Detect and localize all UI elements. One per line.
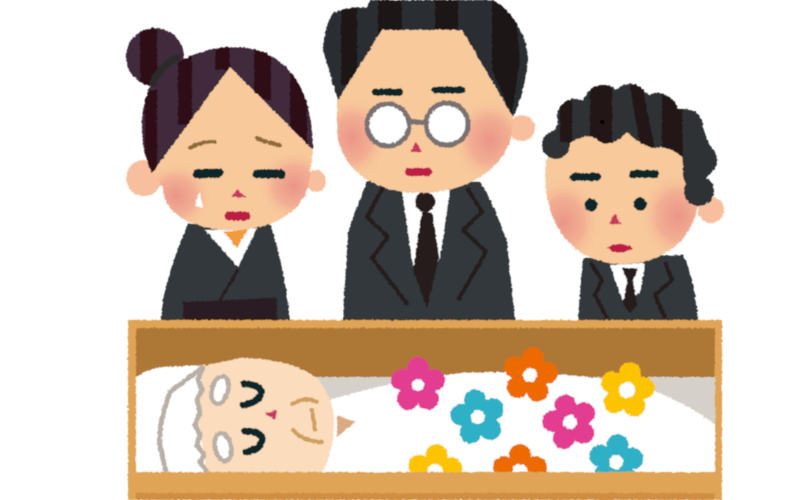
woman face (152, 66, 314, 232)
figure: woman (126, 25, 330, 320)
coffin frame (128, 320, 722, 500)
man ear (509, 115, 535, 141)
flower: teal (450, 388, 504, 445)
woman ears (126, 160, 326, 196)
man facial features (375, 90, 462, 172)
flower: pink large (542, 394, 596, 450)
figure: man with glasses (316, 0, 535, 320)
deceased: nose (337, 415, 355, 437)
woman kimono (161, 223, 290, 320)
boy suit (578, 255, 698, 320)
man hair (323, 0, 528, 117)
coffin bottom edge (136, 493, 715, 500)
man face (336, 28, 514, 195)
figure: boy (525, 84, 724, 320)
woman hair (142, 40, 313, 175)
coffin (128, 320, 722, 500)
boy curly hair (542, 84, 717, 206)
flower: orange cut off (492, 443, 548, 474)
deceased: eyebrows (209, 374, 234, 462)
flower: teal cut off (588, 433, 644, 474)
man glasses (367, 103, 468, 146)
boy face (544, 132, 698, 265)
deceased: mouth and wrinkles (292, 399, 322, 442)
coffin interior back wall (136, 328, 715, 472)
coffin cloth and pillow (136, 365, 715, 472)
woman hair bun (126, 25, 184, 90)
flower: pink (391, 357, 445, 410)
flower: yellow (600, 361, 656, 418)
flowers (390, 346, 656, 474)
woman facial features (190, 138, 281, 216)
deceased: closed eyes (243, 384, 262, 452)
man suit (343, 180, 515, 320)
deceased: head (195, 358, 334, 472)
deceased: nose mark (265, 410, 277, 420)
illustration: family mourning at a coffin (124, 0, 726, 500)
flower: orange (504, 346, 559, 402)
flower: yellow cut off (408, 443, 464, 474)
boy ear (698, 197, 724, 223)
boy facial features (574, 174, 655, 251)
